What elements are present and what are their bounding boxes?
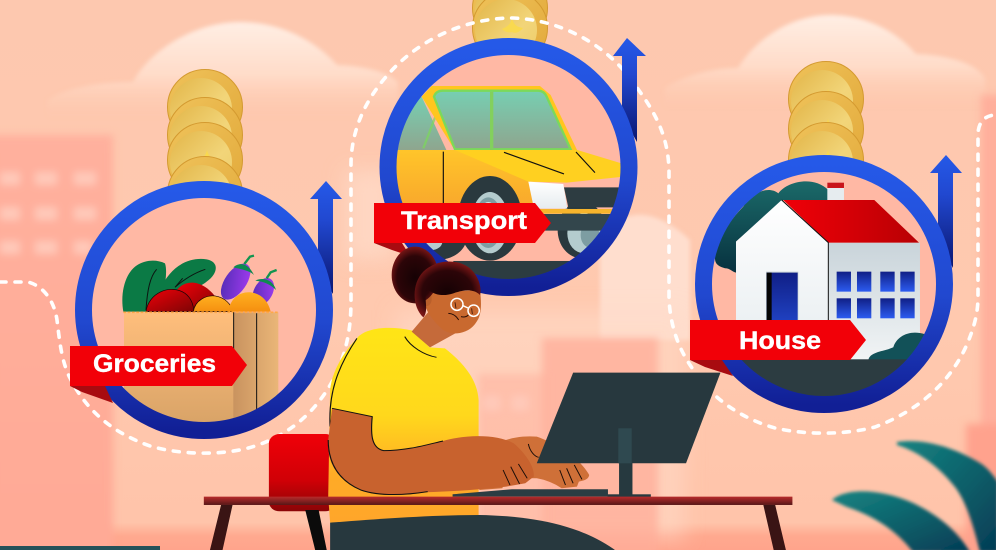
keyboard [453,489,608,497]
ring: groceries [84,190,324,430]
arrow: groceries [310,181,342,294]
glasses [451,298,479,316]
label text: house: House [739,327,821,355]
panel: groceries [84,190,324,430]
shirt [328,328,479,523]
label ribbon: transport [374,203,551,256]
coin stack: house [788,62,864,198]
ring: transport [388,46,629,288]
arm, keyboard, monitor and desk [204,337,792,550]
label ribbon: house [690,320,866,376]
far arm [479,436,589,490]
monitor [537,373,720,497]
icon: house [715,181,924,396]
trousers [330,515,617,550]
ring: house [704,164,944,404]
arrow: house [930,155,962,268]
near arm [328,408,534,495]
dashed money path [0,18,996,453]
plant leaves bottom right [832,441,996,550]
label text: transport: Transport [401,207,528,235]
label text: groceries: Groceries [93,350,216,378]
panel: house [704,164,947,404]
label ribbon: groceries [70,346,247,403]
icon: yellow car [396,86,620,279]
arrow: transport [613,38,646,142]
coin stack: groceries [168,70,242,232]
icon: grocery bag [122,256,278,426]
figure: woman at desk [204,247,792,550]
desk [204,497,792,550]
panel: transport [388,46,629,301]
coin stack: transport [472,0,548,66]
chair [269,434,336,550]
head [392,247,481,347]
